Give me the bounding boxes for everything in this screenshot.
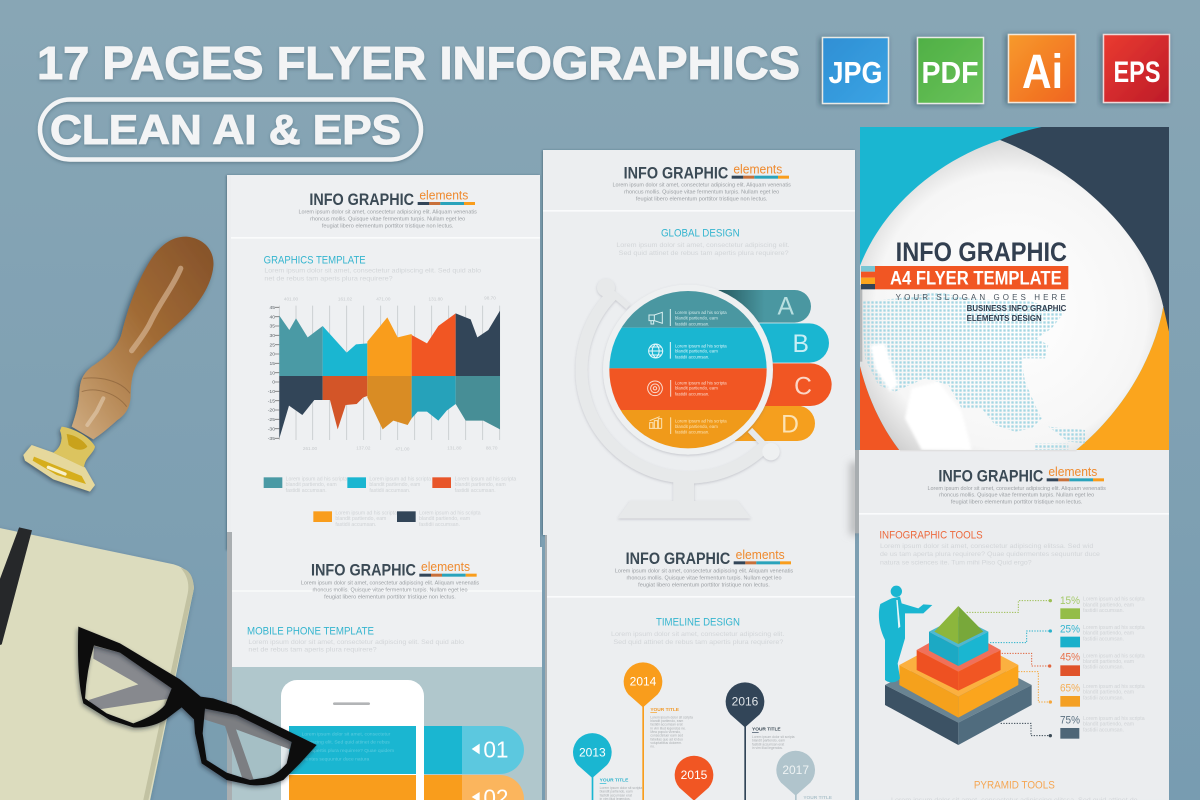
- band D content: fastidii accumsan.: [675, 429, 709, 434]
- item 75%: Lorem ipsum ad his scripta: [1083, 716, 1145, 722]
- section intro: net de rebus tam aperis plura requirere?: [264, 276, 393, 283]
- tab C: C: [794, 374, 812, 401]
- wax seal stamp: [23, 237, 214, 492]
- section intro: Lorem ipsum dolor sit amet, consectetur adipiscing elit.: [616, 242, 790, 249]
- area chart: 131.80: [447, 445, 462, 450]
- item 25%: fastidii accumsan.: [1083, 636, 1124, 642]
- tabs A-D: [718, 290, 832, 441]
- pin 2014: YOUR TITLE: [650, 707, 680, 713]
- section intro: [264, 268, 481, 283]
- area chart: 401.00: [284, 296, 299, 301]
- area chart: 15: [269, 361, 275, 367]
- icon: megaphone: [649, 312, 662, 324]
- header title: [615, 548, 794, 589]
- band B content: fastidii accumsan.: [675, 354, 709, 359]
- header title: feugiat libero elementum porttitor tristique non lectus.: [638, 583, 770, 589]
- pin 2017: 2017: [782, 763, 809, 777]
- flyer cover: [859, 127, 1169, 451]
- area chart: 35: [269, 324, 275, 330]
- area chart: 40: [269, 314, 275, 320]
- pin 2014: voluptatibus dolorem.: [650, 741, 682, 745]
- header title: feugiat libero elementum porttitor tristique non lectus.: [322, 223, 453, 229]
- item 65%: Lorem ipsum ad his scripta: [1083, 684, 1145, 690]
- pin 2016: YOUR TITLE: [752, 727, 781, 733]
- section heading: GRAPHICS TEMPLATE: [264, 254, 366, 266]
- item 15%: Lorem ipsum ad his scripta: [1083, 597, 1145, 603]
- cover title: INFO GRAPHIC: [896, 237, 1067, 267]
- legend: fastidii accumsan.: [455, 488, 496, 494]
- band D content: Lorem ipsum ad his scripta: [675, 419, 727, 424]
- pin 2013: 2013: [579, 745, 606, 759]
- page: infographic tools: [855, 450, 1169, 800]
- header title: INFO GRAPHIC: [626, 549, 730, 568]
- legend: fastidii accumsan.: [419, 522, 460, 528]
- header title: Lorem ipsum dolor sit amet, consectetur adipiscing elit. Aliquam venenatis: [615, 568, 794, 574]
- item 75%: fastidii accumsan.: [1083, 727, 1124, 733]
- header title: rhoncus mollis. Quisque vitae fermentum turpis. Nullam eget leo: [312, 588, 468, 594]
- area chart: 30: [269, 333, 275, 339]
- item 65%: blandit partiendo, eam: [1083, 690, 1134, 696]
- pin 2014: consectetuer eam sed: [650, 734, 683, 738]
- header title: Lorem ipsum dolor sit amet, consectetur adipiscing elit. Aliquam venenatis: [301, 581, 480, 587]
- pin 2016: 2016: [732, 695, 759, 709]
- section intro: [248, 639, 464, 654]
- page: global design: [543, 150, 855, 535]
- section intro: Lorem ipsum dolor sit amet, consectetur adipiscing elit. Sed quid ablo: [248, 639, 464, 646]
- pin 2014: fastidii accumsan erat: [650, 723, 683, 727]
- right lens arm: [204, 708, 292, 783]
- tab C: [758, 363, 832, 406]
- subtitle pill: CLEAN AI & EPS: [50, 106, 401, 153]
- section intro: [880, 543, 1100, 566]
- legend: Lorem ipsum ad his scripta: [335, 511, 397, 517]
- icon: JPG badge: JPG: [828, 55, 882, 90]
- icon: bar chart: [649, 417, 662, 428]
- pin 2015: 2015: [681, 768, 708, 782]
- pin 2017: [776, 751, 833, 800]
- header title: rhoncus mollis. Quisque vitae fermentum turpis. Nullam eget leo: [624, 190, 779, 196]
- header title: rhoncus mollis. Quisque vitae fermentum turpis. Nullam eget leo: [939, 493, 1094, 499]
- section intro: Lorem ipsum dolor sit amet, consectetur adipiscing elitssa. Sed wid: [880, 543, 1094, 550]
- pin 2013: Lorem ipsum dolor sit scripta: [600, 786, 642, 790]
- legend: blandit partiendo, eam: [335, 516, 386, 522]
- header title: Lorem ipsum dolor sit amet, consectetur adipiscing elit. Aliquam venenatis: [298, 209, 477, 215]
- phone mockup: tam apertis plura requirere? Quae quidem: [302, 748, 394, 754]
- pin 2013: YOUR TITLE: [600, 778, 629, 784]
- legend: blandit partiendo, eam: [369, 482, 420, 488]
- pin 2016: [726, 682, 795, 800]
- pyramid: [885, 606, 1032, 745]
- section heading: TIMELINE DESIGN: [656, 616, 740, 628]
- tab 02: [424, 775, 524, 800]
- cover subtitle: ELEMENTS DESIGN: [967, 313, 1042, 323]
- legend: fastidii accumsan.: [369, 488, 410, 494]
- area chart: 10: [269, 370, 275, 376]
- tab B: B: [792, 331, 809, 358]
- icon: globe: [649, 344, 663, 358]
- shadow at cover edge: [845, 462, 857, 535]
- legend: Lorem ipsum ad his scripta: [419, 511, 481, 517]
- white disc: [859, 140, 1163, 451]
- header title: [298, 189, 477, 229]
- glasses: [78, 627, 317, 785]
- band C content: blandit partiendo, eam: [675, 386, 718, 391]
- icon: PDF badge: PDF: [922, 55, 978, 90]
- header title: feugiat libero elementum porttitor tristique non lectus.: [951, 500, 1082, 506]
- pin 2014: blandit partiendo, eam: [650, 719, 683, 723]
- subtitle pill: [40, 100, 421, 160]
- pin 2016: in vim illud legendos.: [752, 746, 783, 750]
- cover banner: A4 FLYER TEMPLATE: [890, 268, 1062, 289]
- item 45%: Lorem ipsum ad his scripta: [1083, 653, 1145, 659]
- area chart: -25: [268, 417, 275, 423]
- page: timeline design: [545, 535, 857, 800]
- section heading: GLOBAL DESIGN: [661, 228, 740, 240]
- left lens arm: [89, 646, 172, 710]
- tab 01: [424, 726, 524, 774]
- area chart: -30: [268, 426, 275, 432]
- pin 2013: [573, 733, 642, 800]
- pin 2014: in vim illud legendos ne.: [650, 726, 686, 730]
- icon: JPG badge: [822, 38, 888, 104]
- band D content: blandit partiendo, eam: [675, 424, 718, 429]
- icon: PDF badge: [918, 38, 984, 104]
- header title: feugiat libero elementum porttitor tristique non lectus.: [324, 595, 456, 601]
- header title: elements: [1048, 465, 1097, 479]
- pin 2014: fabellas quo ad id duo: [650, 737, 683, 741]
- pin 2013: fastidii accumsan erat: [600, 793, 632, 797]
- band A content: Lorem ipsum ad his scripta: [675, 310, 727, 315]
- item 75%: [1049, 715, 1145, 739]
- pin 2014: [624, 662, 693, 800]
- icon: Ai badge: [1008, 34, 1076, 102]
- area chart: 88.70: [486, 445, 498, 450]
- header title: [927, 465, 1106, 506]
- section intro: de us tam aperta plura requirere? Quae quidermentes sequuntur duce: [880, 551, 1100, 558]
- page: mobile phone template: [227, 532, 542, 800]
- area chart: 45: [269, 305, 275, 311]
- area chart: -10: [268, 389, 275, 395]
- item 25%: Lorem ipsum ad his scripta: [1083, 625, 1145, 631]
- band C content: Lorem ipsum ad his scripta: [675, 380, 727, 385]
- item 45%: 45%: [1060, 652, 1080, 664]
- tab B: [758, 323, 829, 363]
- cover subtitle: BUSINESS INFO GRAPHIC: [967, 303, 1067, 313]
- pin 2014: Mea populo vivendo,: [650, 730, 681, 734]
- band C content: fastidii accumsan.: [675, 391, 709, 396]
- section heading: pyramid tools: PYRAMID TOOLS: [974, 780, 1055, 792]
- page: graphics template: [227, 175, 540, 550]
- slogan: YOUR SLOGAN GOES HERE: [896, 293, 1066, 302]
- icon: businessman silhouette: [879, 586, 932, 682]
- area chart: -20: [268, 408, 275, 414]
- legend: Lorem ipsum ad his scripta: [369, 477, 431, 483]
- area chart: 0: [272, 380, 275, 386]
- area chart: -35: [268, 436, 275, 442]
- item 25%: blandit partiendo, eam: [1083, 631, 1134, 637]
- cover subtitle: [967, 303, 1067, 323]
- dark corner shape: [1000, 127, 1169, 338]
- band A content: fastidii accumsan.: [675, 321, 709, 326]
- header title: INFO GRAPHIC: [311, 560, 416, 579]
- stamp base: [23, 445, 95, 492]
- header title: INFO GRAPHIC: [309, 190, 414, 209]
- area chart: 137.02: [356, 445, 371, 450]
- item 25%: 25%: [1060, 623, 1080, 635]
- section intro: Lorem ipsum dolor sit amet, consectetur adipiscing elit.: [611, 631, 784, 638]
- area chart: [268, 296, 500, 451]
- item 25%: [1049, 623, 1145, 647]
- header title: [301, 560, 480, 601]
- pin 2016: fastidii accumsan erat: [752, 742, 784, 746]
- main title: 17 PAGES FLYER INFOGRAPHICS: [37, 37, 800, 89]
- dotted world map: [862, 292, 1085, 450]
- band A content: blandit partiendo, eam: [675, 316, 718, 321]
- area chart: 25: [269, 342, 275, 348]
- area chart: -15: [268, 398, 275, 404]
- area chart: 131.80: [429, 296, 443, 301]
- phone mockup: mentes sequuntur duce natura: [302, 756, 370, 762]
- band D content: [649, 417, 727, 434]
- icon: target: [648, 381, 662, 396]
- pin 2016: blandit partiendo, eam: [752, 739, 785, 743]
- legend: [264, 477, 516, 528]
- tab 01: 01: [483, 737, 509, 763]
- item 15%: fastidii accumsan.: [1083, 608, 1124, 614]
- icon: Ai badge: Ai: [1022, 46, 1063, 99]
- tab A: [718, 290, 811, 323]
- item 15%: [1049, 595, 1145, 619]
- right lens tint: [203, 709, 292, 780]
- header title: rhoncus mollis. Quisque vitae fermentum turpis. Nullam eget leo: [626, 575, 782, 581]
- phone mockup: adipiscing elit. Sed quid attinet de rebus: [302, 740, 390, 746]
- teal panel: [232, 667, 542, 800]
- area chart: 98.70: [484, 296, 496, 301]
- band C content: [648, 380, 727, 397]
- tab D: D: [781, 412, 799, 439]
- header title: elements: [733, 162, 782, 176]
- red corner shape: [860, 366, 899, 450]
- item 15%: blandit partiendo, eam: [1083, 602, 1134, 608]
- section intro: natura se sciences ite. Tum mihi Piso Quid ergo?: [880, 559, 1032, 566]
- item 45%: fastidii accumsan.: [1083, 665, 1124, 671]
- item 15%: 15%: [1060, 595, 1080, 607]
- section intro: [611, 631, 784, 646]
- icon: EPS badge: EPS: [1114, 56, 1160, 89]
- header title: [612, 162, 791, 202]
- icon: EPS badge: [1104, 34, 1170, 102]
- item 75%: blandit partiendo, eam: [1083, 722, 1134, 728]
- orange corner shape: [1075, 307, 1169, 451]
- item 45%: [1048, 652, 1145, 676]
- header title: feugiat libero elementum porttitor tristique non lectus.: [636, 196, 767, 202]
- pin 2014: 2014: [630, 675, 657, 689]
- section intro: net de rebus tam aperis plura requirere?: [248, 647, 377, 654]
- header title: Lorem ipsum dolor sit amet, consectetur adipiscing elit. Aliquam venenatis: [927, 486, 1106, 492]
- header title: elements: [736, 548, 785, 562]
- legend: blandit partiendo, eam: [455, 482, 506, 488]
- band B content: [649, 342, 727, 359]
- area chart: 471.00: [395, 446, 410, 451]
- item 65%: 65%: [1060, 683, 1080, 695]
- legend: blandit partiendo, eam: [286, 482, 337, 488]
- header title: elements: [419, 189, 468, 203]
- item 45%: blandit partiendo, eam: [1083, 659, 1134, 665]
- pin 2014: no.: [650, 745, 655, 749]
- tab A: A: [777, 294, 794, 321]
- header title: Lorem ipsum dolor sit amet, consectetur adipiscing elit. Aliquam venenatis: [612, 183, 791, 189]
- legend: Lorem ipsum ad his scripta: [455, 477, 516, 483]
- connectors: [967, 601, 1050, 736]
- section intro: Sed quid attinet de rebus tam apertis plura requirere?: [613, 639, 784, 646]
- area chart: 261.00: [303, 446, 318, 451]
- pin 2015: [675, 756, 713, 800]
- item 65%: [1049, 683, 1145, 707]
- tab D: [735, 406, 815, 441]
- area chart: 161.02: [338, 296, 353, 301]
- area chart: 20: [269, 352, 275, 358]
- item 65%: fastidii accumsan.: [1083, 695, 1124, 701]
- legend: Lorem ipsum ad his scripta: [286, 477, 347, 483]
- globe sphere: [603, 285, 773, 455]
- section intro: Sed quid attinet de rebus tam apertis plura requirere?: [619, 250, 789, 257]
- pin 2016: Lorem ipsum dolor sit scripta: [752, 735, 795, 739]
- notebook: [0, 527, 194, 800]
- legend: fastidii accumsan.: [335, 522, 376, 528]
- item 75%: 75%: [1060, 715, 1080, 727]
- section heading: INFOGRAPHIC TOOLS: [879, 529, 983, 541]
- header title: INFO GRAPHIC: [624, 163, 728, 182]
- section intro: [616, 242, 790, 257]
- section heading: MOBILE PHONE TEMPLATE: [247, 625, 374, 637]
- header title: INFO GRAPHIC: [938, 467, 1043, 486]
- band B content: Lorem ipsum ad his scripta: [675, 343, 727, 348]
- notebook ribbon: [0, 527, 32, 646]
- section intro: Lorem ipsum dolor sit amet, consectetur adipiscing elit. Sed quid ablo: [264, 268, 481, 275]
- phone mockup: Lorem ipsum dolor sit amet, consectetur: [302, 731, 391, 737]
- pin 2014: Lorem ipsum dolor sit scripta: [650, 715, 693, 719]
- legend: blandit partiendo, eam: [419, 516, 470, 522]
- phone mockup: [281, 680, 424, 800]
- frame: [78, 627, 317, 785]
- band A content: [649, 309, 727, 326]
- header title: elements: [421, 560, 470, 574]
- globe stand: [581, 279, 780, 518]
- area chart: 471.00: [376, 296, 391, 301]
- band B content: blandit partiendo, eam: [675, 349, 718, 354]
- pin 2013: blandit partiendo, eam: [600, 790, 633, 794]
- header title: rhoncus mollis. Quisque vitae fermentum turpis. Nullam eget leo: [310, 216, 465, 222]
- stamp collar: [53, 427, 95, 467]
- legend: fastidii accumsan.: [286, 488, 327, 494]
